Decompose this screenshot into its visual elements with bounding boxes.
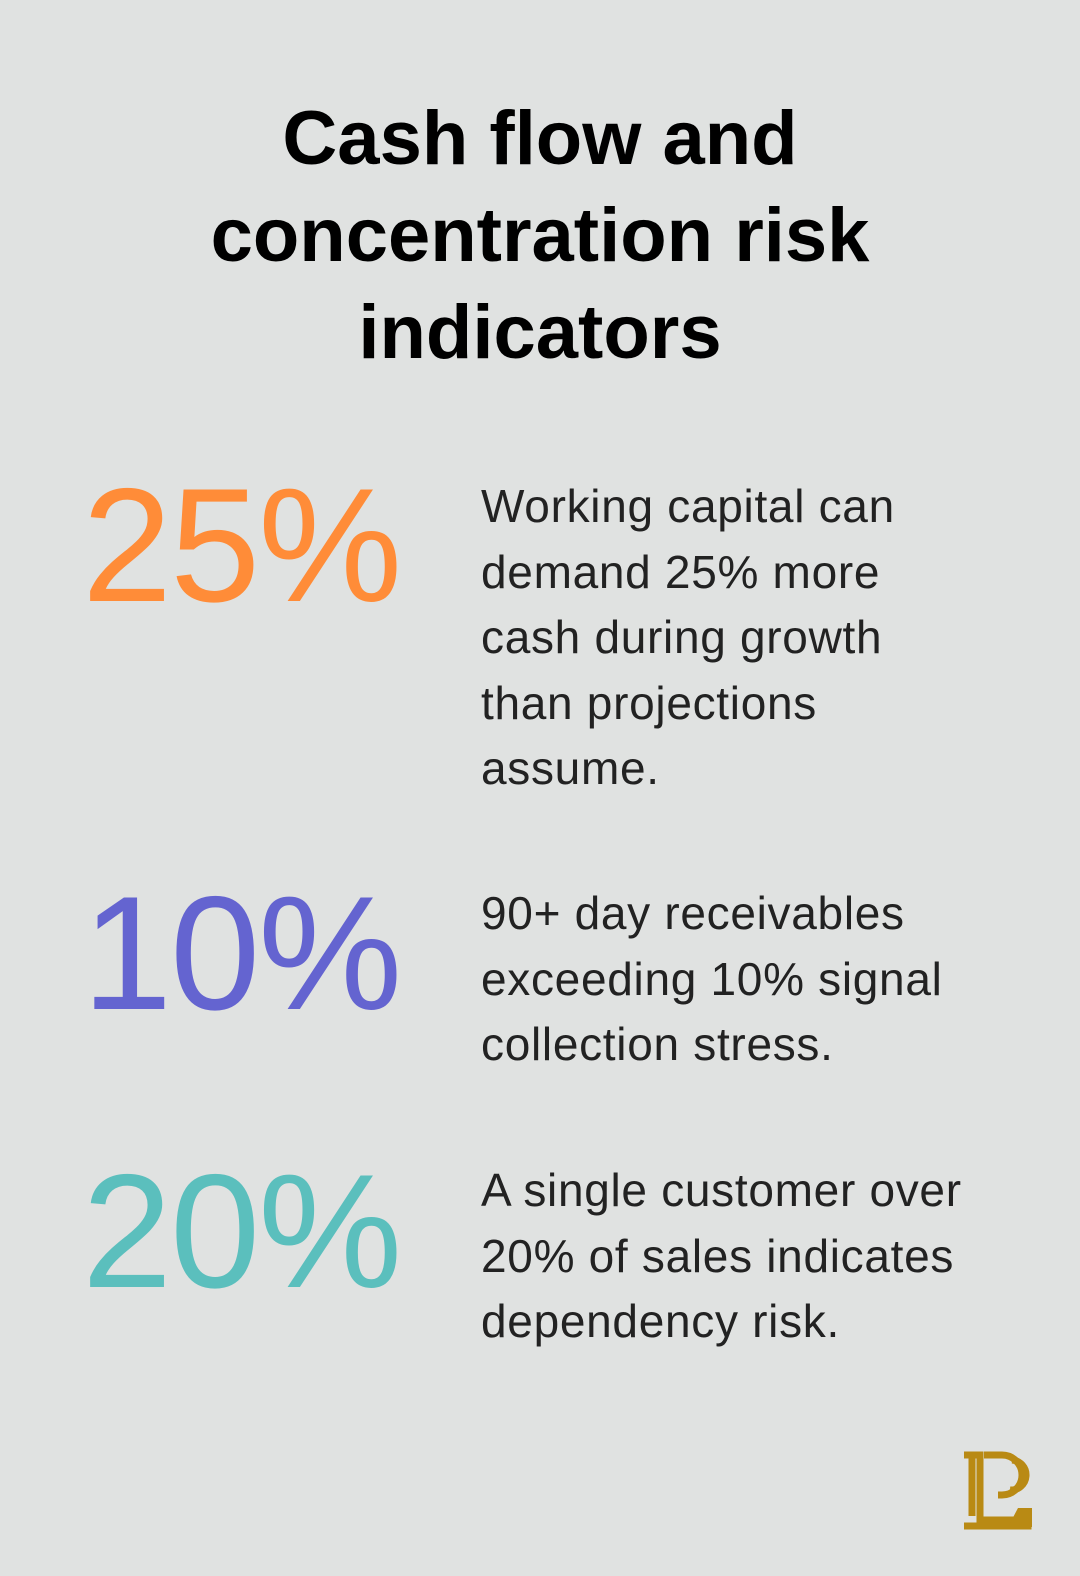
stat 1 number: 25% [82,455,400,636]
title: Cash flow and [282,96,798,181]
icon: logo [964,1452,1032,1530]
stat 2 number: 10% [82,863,400,1044]
stat 3 number: 20% [82,1141,400,1322]
stat 1 text: demand 25% more [481,546,880,598]
stat 2 text: 90+ day receivables [481,887,905,939]
title: indicators [358,290,722,375]
stat 1 text: than projections [481,676,817,728]
stat 3 text: 20% of sales indicates [481,1230,954,1282]
stat 1 text [481,480,895,794]
stat 2 text [481,887,943,1070]
stat 2 text: exceeding 10% signal [481,952,943,1004]
stat 3 text: dependency risk. [481,1295,840,1347]
stat 1 text: Working capital can [481,480,895,532]
stat 1 text: cash during growth [481,611,882,663]
stat 3 text: A single customer over [481,1164,962,1216]
stat 2 text: collection stress. [481,1018,834,1070]
stat 3 text [481,1164,962,1347]
title: concentration risk [211,193,869,278]
stat 1 text: assume. [481,742,660,794]
title [211,96,870,375]
